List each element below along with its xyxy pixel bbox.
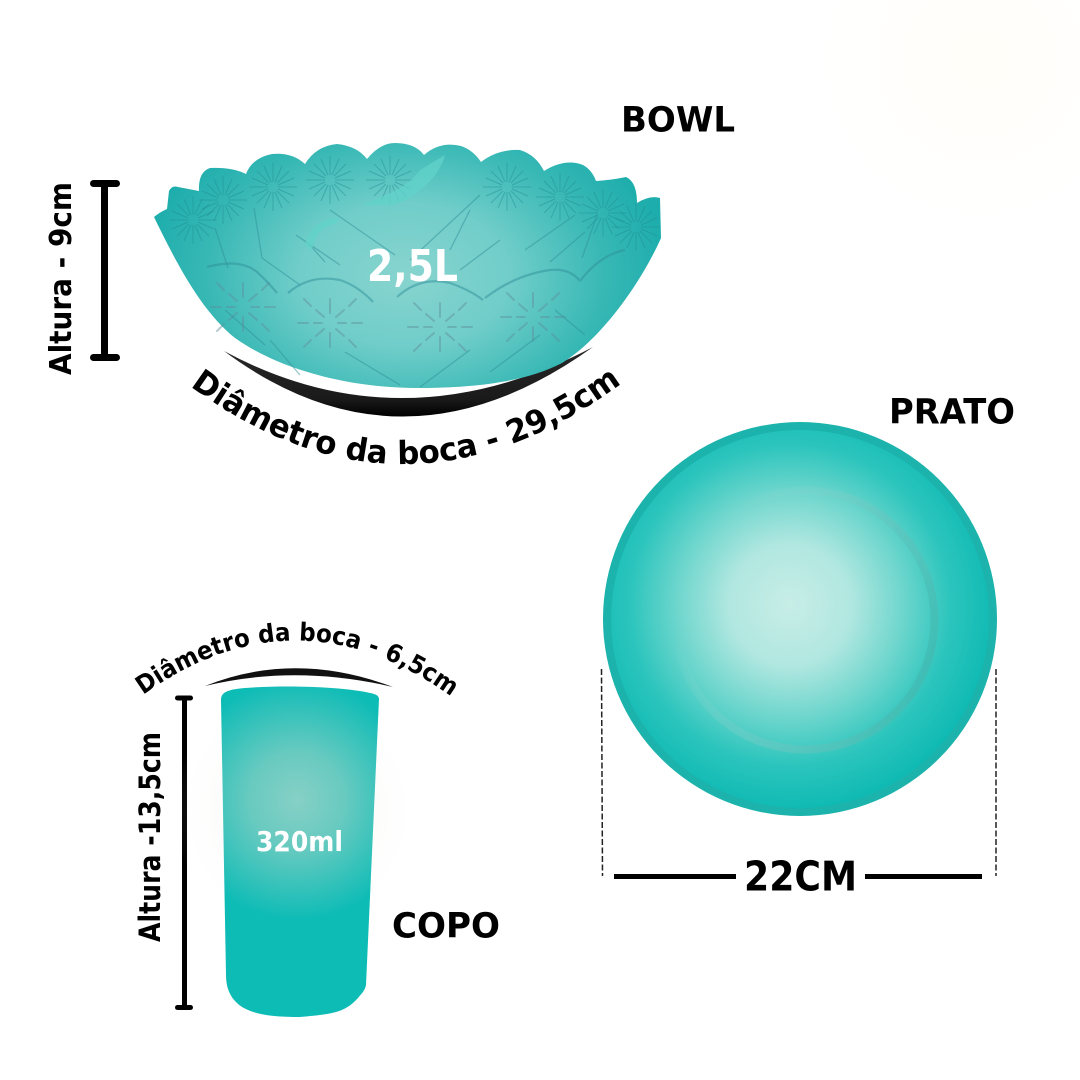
cup body bbox=[221, 687, 379, 1017]
cup height label: Altura -13,5cm bbox=[133, 732, 167, 942]
bowl height measure bbox=[90, 180, 120, 361]
plate bbox=[603, 422, 997, 816]
cup diameter curve bbox=[205, 668, 393, 687]
plate diameter measure bbox=[614, 874, 982, 879]
cup height measure bbox=[175, 696, 193, 1010]
bowl title: BOWL bbox=[621, 100, 735, 140]
bowl body bbox=[154, 143, 661, 388]
cup capacity: 320ml bbox=[256, 825, 343, 858]
bowl diameter curve bbox=[224, 347, 593, 417]
plate rim bbox=[603, 422, 997, 816]
cup diameter label: Diâmetro da boca - 6,5cm bbox=[134, 622, 456, 696]
bowl top starbursts bbox=[169, 156, 660, 251]
plate diameter label: 22CM bbox=[744, 852, 857, 900]
bowl diameter label: Diâmetro da boca - 29,5cm bbox=[192, 368, 620, 464]
bowl lower starbursts bbox=[211, 283, 565, 351]
bowl height label: Altura - 9cm bbox=[44, 182, 79, 375]
plate diameter dashed guides bbox=[602, 669, 996, 876]
cup title: COPO bbox=[392, 906, 500, 946]
cup halo bbox=[172, 685, 422, 935]
bowl highlights bbox=[305, 155, 445, 250]
bowl cut-glass pattern bbox=[207, 195, 625, 387]
plate inner ring bbox=[676, 490, 934, 750]
bowl capacity: 2,5L bbox=[367, 241, 458, 292]
plate title: PRATO bbox=[889, 392, 1015, 432]
bowl bbox=[154, 143, 661, 388]
cup bbox=[172, 685, 422, 1017]
plate surface bbox=[611, 430, 989, 808]
